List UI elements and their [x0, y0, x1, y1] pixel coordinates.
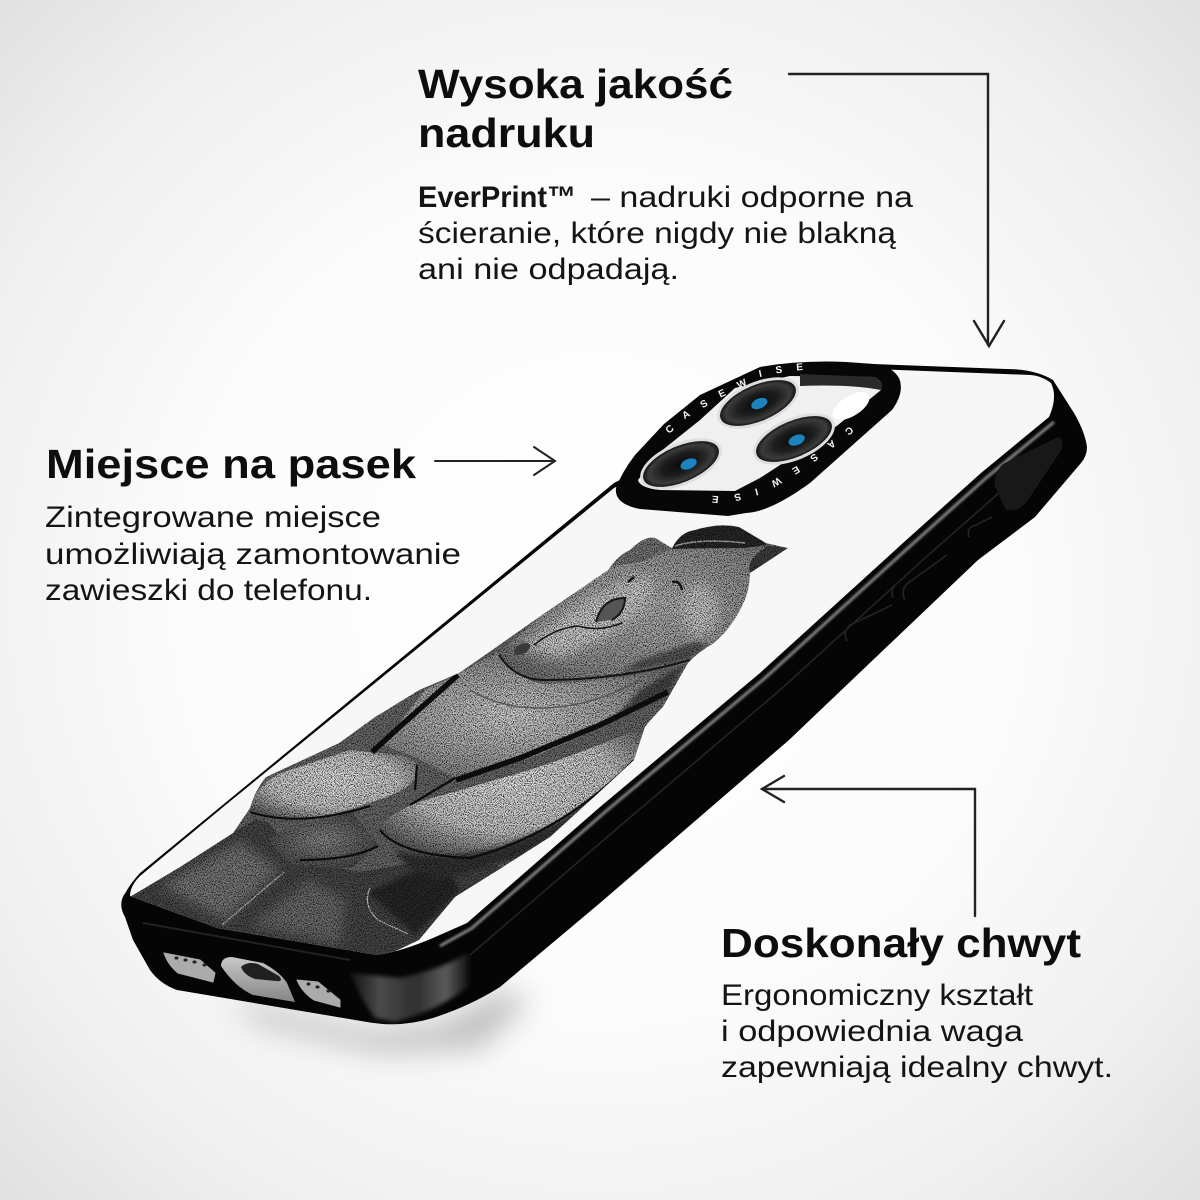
phone case [121, 363, 1087, 1024]
side edge shading [143, 422, 1060, 960]
corner highlight [350, 952, 470, 1022]
body text: EverPrint™ [418, 181, 576, 214]
bear face lines [470, 577, 690, 708]
bear illustration [128, 525, 788, 960]
body text: ścieranie, które nigdy nie blakną [418, 217, 896, 250]
body text [418, 181, 913, 286]
under arm shadow [395, 795, 600, 880]
left arm [250, 750, 418, 822]
heading: Miejsce na pasek [46, 441, 416, 487]
camera glass [638, 376, 882, 491]
body text: i odpowiednia waga [721, 1015, 1023, 1048]
left strap [372, 675, 458, 752]
right strap [456, 692, 668, 780]
sweater belly [382, 652, 690, 778]
body text: Zintegrowane miejsce [45, 501, 381, 534]
body text: – nadruki odporne na [591, 181, 913, 214]
pocket seam [367, 888, 408, 934]
side buttons [845, 517, 992, 641]
dark pocket [369, 871, 460, 936]
lens left [633, 428, 729, 500]
inner shadow [800, 374, 882, 390]
right speaker [297, 980, 340, 1007]
phone shadow [230, 990, 530, 1052]
hat band [675, 541, 745, 546]
pants highlight [160, 842, 280, 920]
head [499, 538, 766, 685]
heading: Doskonały chwyt [721, 920, 1081, 966]
rim lettering bottom: CASEWISE [712, 427, 853, 504]
flash highlight [828, 386, 874, 426]
ear left [612, 537, 672, 566]
body text: Ergonomiczny kształt [721, 979, 1034, 1012]
camera surround [616, 362, 901, 516]
lower belly [268, 812, 378, 868]
lens top [710, 367, 806, 439]
arrow to side grip [762, 776, 975, 916]
chest shadow [610, 664, 685, 722]
pants highlight center [250, 880, 345, 945]
body text: umożliwiają zamontowanie [45, 538, 461, 571]
pants [128, 815, 503, 960]
callout: print quality [418, 61, 1004, 346]
pants seam [222, 872, 284, 925]
charging port [221, 957, 295, 1002]
callout: grip [721, 776, 1113, 1084]
head shadow [620, 642, 710, 674]
right arm [380, 726, 645, 856]
bear silhouette [128, 525, 788, 960]
ear right [749, 546, 788, 575]
heading: nadruku [418, 110, 595, 156]
lens right [746, 403, 842, 475]
body text [721, 979, 1113, 1084]
body text: zapewniają idealny chwyt. [721, 1051, 1113, 1084]
callout: strap slot [45, 441, 555, 607]
cheek light [682, 584, 718, 636]
body text: ani nie odpadają. [418, 253, 679, 286]
white back panel [130, 368, 1054, 955]
left speaker [164, 953, 215, 982]
body text: zawieszki do telefonu. [45, 574, 372, 607]
side tab [995, 437, 1063, 511]
case body [121, 363, 1087, 1024]
arrow to case back [789, 74, 1004, 346]
cuff and arm folds [250, 760, 634, 860]
heading: Wysoka jakość [418, 61, 733, 107]
snout [515, 575, 655, 658]
rim lettering top: CASEWISE [666, 363, 803, 432]
camera rim [616, 362, 901, 516]
hat [672, 526, 767, 549]
arrow to strap slot [435, 447, 555, 475]
body text [45, 501, 461, 607]
heading [418, 61, 733, 156]
